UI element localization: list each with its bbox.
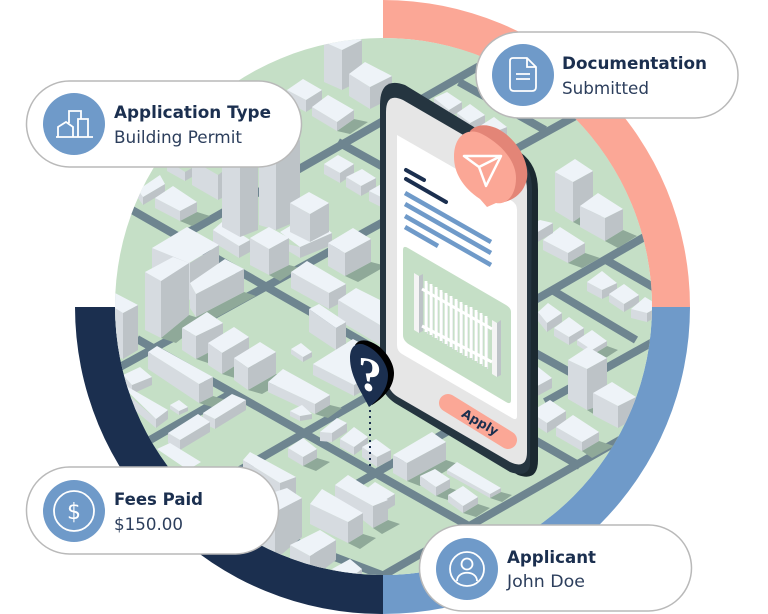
image panel (403, 247, 511, 403)
card text (506, 548, 596, 591)
location pin with question mark (350, 340, 394, 467)
button label: Apply (459, 406, 501, 439)
card text: Submitted (562, 79, 649, 98)
icon: dollar coin: $ (67, 500, 81, 525)
apply button (448, 403, 508, 440)
large L-shaped block (152, 248, 190, 300)
card text (114, 103, 271, 147)
podium blocks and towers (213, 230, 239, 258)
card: fees paid (26, 467, 278, 554)
phone screen (397, 135, 517, 419)
icon: buildings (43, 93, 105, 155)
card text: Fees Paid (114, 490, 203, 510)
card text: John Doe (506, 572, 585, 591)
ring segment: salmon (383, 0, 690, 307)
ring segment: navy (75, 307, 383, 614)
ring segment: blue (383, 307, 690, 614)
card text: $150.00 (114, 515, 183, 534)
card: application type (26, 81, 302, 167)
card text: Application Type (114, 103, 271, 123)
card text: Applicant (507, 548, 596, 568)
document heading lines (406, 170, 446, 202)
phone (380, 83, 538, 477)
icon: user (436, 538, 498, 600)
card text: Documentation (562, 54, 707, 74)
question mark: ? (358, 346, 382, 405)
roads (120, 60, 660, 600)
document body lines (405, 193, 491, 265)
phone body (380, 84, 538, 477)
card text (562, 54, 707, 98)
card: applicant (420, 525, 692, 611)
card text (114, 490, 203, 534)
send bubble icon (454, 125, 527, 207)
card text: Building Permit (114, 128, 243, 147)
icon: fence (414, 273, 501, 377)
dotted leader (369, 410, 371, 467)
card: documentation (476, 32, 738, 118)
buildings (115, 30, 660, 590)
icon: dollar coin (43, 480, 105, 542)
icon: paper plane (464, 156, 501, 186)
icon: document (492, 44, 554, 106)
isometric city map (110, 30, 660, 600)
phone face (386, 98, 527, 464)
